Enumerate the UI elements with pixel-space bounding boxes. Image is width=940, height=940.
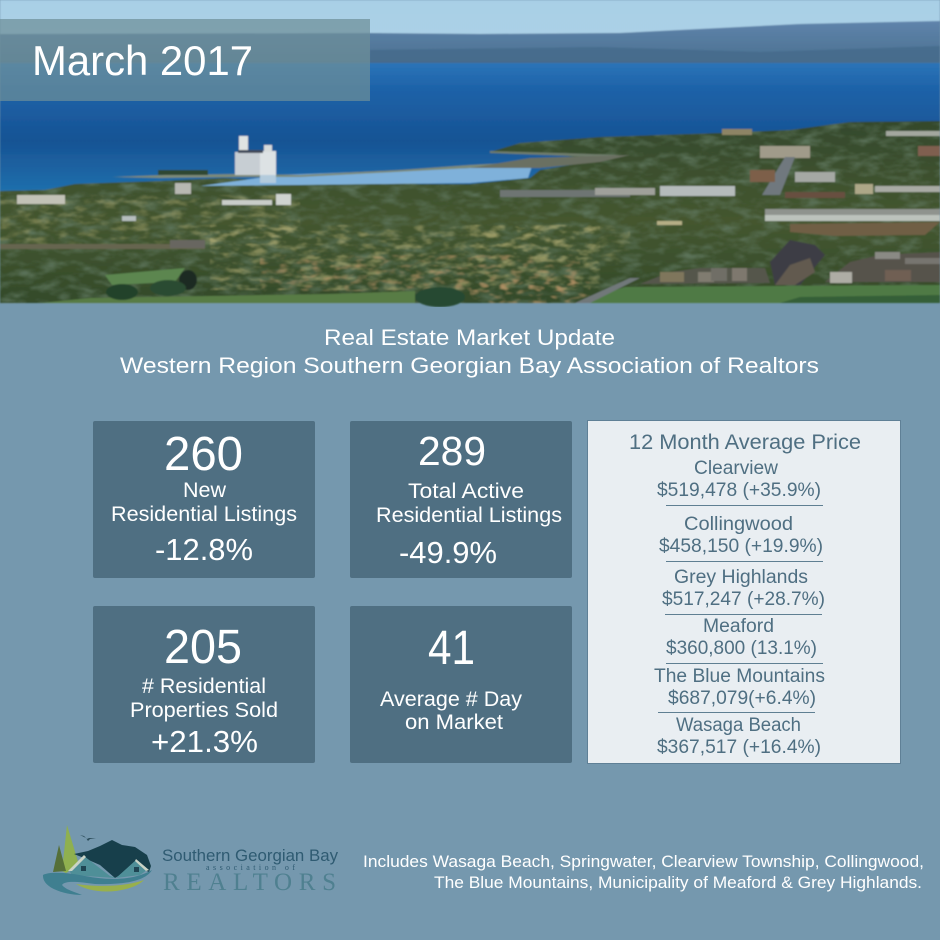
icon: trees	[53, 825, 79, 873]
price: Meaford: Meaford	[703, 616, 774, 637]
houses	[640, 240, 940, 285]
panel: new listings: -12.8%	[155, 532, 253, 567]
price: Grey Highlands: Grey Highlands	[674, 567, 808, 588]
panel: new listings: New	[183, 479, 227, 502]
report title	[120, 325, 819, 378]
panel: active listings: 289	[418, 428, 486, 474]
logo wordmark	[162, 846, 338, 896]
price: Grey Highlands	[662, 567, 825, 610]
logo wordmark: REALTORS	[163, 869, 336, 896]
town and buildings	[0, 129, 940, 249]
header aerial photo	[0, 0, 940, 307]
panel: active listings: Total Active	[408, 480, 524, 503]
panel: new listings: 260	[164, 428, 243, 481]
logo wordmark: Southern Georgian Bay	[162, 846, 338, 865]
price: Clearview: Clearview	[694, 458, 778, 479]
coverage note: The Blue Mountains, Municipality of Meaford & Grey Highlands.	[434, 874, 922, 892]
price: Meaford	[666, 616, 817, 659]
report title: Real Estate Market Update	[324, 325, 615, 350]
icon: green swoosh	[76, 880, 144, 892]
price: The Blue Mountains: $687,079(+6.4%)	[668, 688, 816, 709]
panel: properties sold: 205	[164, 621, 242, 674]
price: Grey Highlands: $517,247 (+28.7%)	[662, 589, 825, 610]
price: Collingwood: $458,150 (+19.9%)	[659, 536, 823, 557]
harbour water	[200, 166, 532, 186]
panel: properties sold: # Residential	[142, 675, 266, 698]
panel: 12 month average price	[588, 420, 900, 764]
coverage note	[363, 853, 924, 892]
panel: properties sold: Properties Sold	[130, 699, 278, 722]
price: Meaford: $360,800 (13.1%)	[666, 638, 817, 659]
panel: active listings: Residential Listings	[376, 504, 562, 527]
price: The Blue Mountains	[654, 666, 825, 709]
near fields	[105, 268, 185, 285]
brown field	[790, 222, 940, 236]
date banner	[0, 19, 370, 101]
price: Clearview	[657, 458, 821, 501]
coverage note: Includes Wasaga Beach, Springwater, Clearview Township, Collingwood,	[363, 853, 924, 871]
panel: properties sold	[93, 606, 315, 763]
panel: active listings: -49.9%	[399, 535, 497, 570]
panel: days on market: 41	[428, 622, 475, 675]
price panel heading: 12 Month Average Price	[629, 431, 861, 454]
icon: house	[68, 855, 149, 878]
panel: new listings	[93, 421, 315, 578]
logo wordmark: association of	[206, 863, 295, 872]
icon: water swoosh	[43, 870, 152, 895]
land mass	[0, 121, 940, 303]
price: Collingwood: Collingwood	[684, 514, 793, 535]
forest texture	[0, 122, 940, 303]
panel: days on market: on Market	[405, 711, 503, 734]
price: Wasaga Beach: $367,517 (+16.4%)	[657, 737, 821, 758]
panel: properties sold: +21.3%	[151, 724, 258, 759]
panel: days on market: Average # Day	[380, 688, 523, 711]
price: Clearview: $519,478 (+35.9%)	[657, 480, 821, 501]
panel: days on market	[350, 606, 572, 763]
price: The Blue Mountains: The Blue Mountains	[654, 666, 825, 687]
price: Wasaga Beach	[657, 715, 821, 758]
panel: active listings	[350, 421, 572, 578]
logo: Southern Georgian Bay Association of Realtors	[43, 825, 338, 896]
panel: new listings: Residential Listings	[111, 503, 297, 526]
report title: Western Region Southern Georgian Bay Association of Realtors	[120, 353, 819, 378]
icon: bird	[80, 835, 96, 841]
icon: mountains	[74, 840, 151, 878]
price: Wasaga Beach: Wasaga Beach	[676, 715, 801, 736]
price: Collingwood	[659, 514, 823, 557]
grain elevator	[235, 136, 276, 183]
date heading: March 2017	[32, 37, 253, 84]
far shoreline	[112, 162, 532, 178]
